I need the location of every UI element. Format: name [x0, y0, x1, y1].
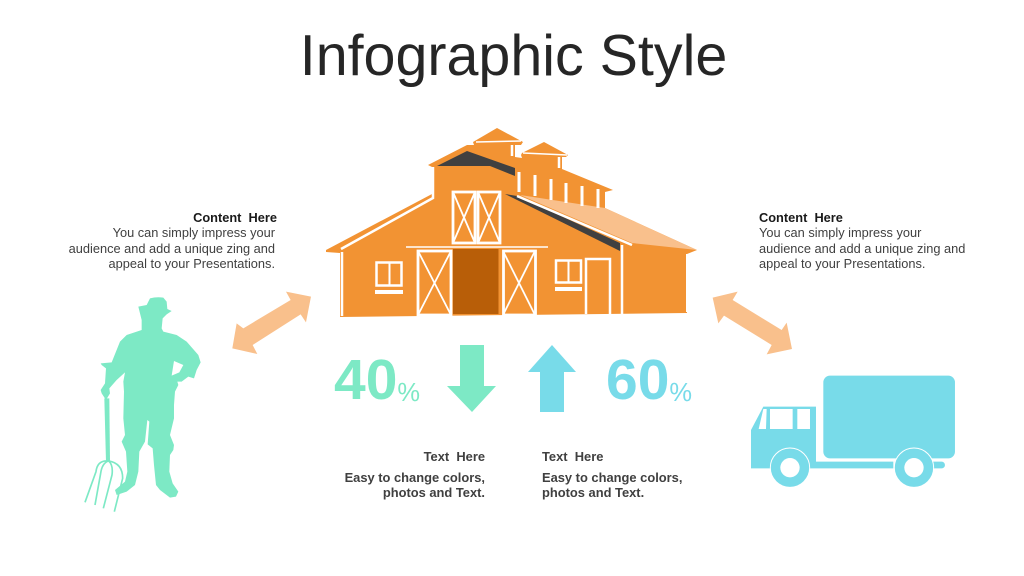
- text block: bottom right: [542, 449, 682, 500]
- stat: 40 percent: 40%: [334, 348, 420, 412]
- arrow: down: [447, 345, 496, 412]
- arrow: barn to farmer: [232, 292, 311, 354]
- text block: bottom left: photos and Text.: [383, 485, 485, 500]
- arrow: barn to truck: [713, 292, 792, 354]
- text block: left content: audience and add a unique zing and: [69, 241, 275, 256]
- text block: right content: [759, 210, 965, 271]
- text block: bottom right: photos and Text.: [542, 485, 644, 500]
- text block: left content: [69, 210, 277, 271]
- text block: bottom left: [345, 449, 485, 500]
- text block: left content: You can simply impress your: [113, 225, 275, 240]
- arrow: up: [528, 345, 576, 412]
- icon: barn: [326, 128, 697, 317]
- text block: bottom right: Text Here Easy to change colors,: [542, 449, 682, 485]
- text block: right content: Content Here: [759, 210, 843, 225]
- stat: 60 percent: 60%: [606, 348, 692, 412]
- text block: left content: Content Here: [193, 210, 277, 225]
- icon: farmer with pitchfork: [85, 297, 201, 512]
- icon: delivery truck: [750, 376, 955, 487]
- title: Infographic Style: [300, 24, 727, 88]
- text block: right content: You can simply impress your: [759, 225, 921, 240]
- text block: right content: audience and add a unique zing and: [759, 241, 965, 256]
- text block: right content: appeal to your Presentations.: [759, 256, 925, 271]
- text block: left content: appeal to your Presentations.: [109, 256, 275, 271]
- text block: bottom left: Text Here Easy to change colors,: [345, 449, 485, 485]
